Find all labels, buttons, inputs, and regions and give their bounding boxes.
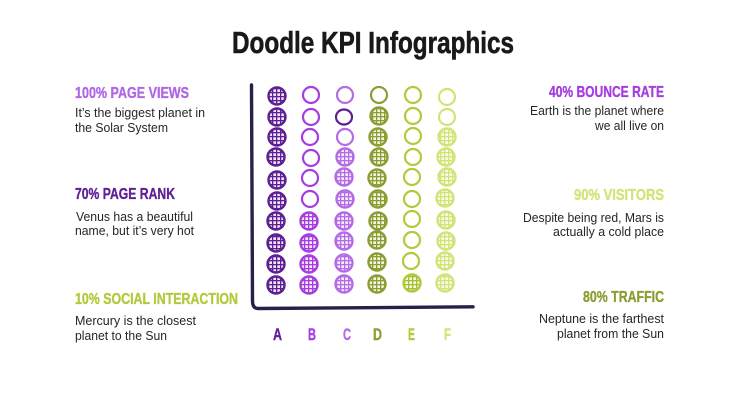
axis labels: [273, 326, 451, 344]
axis labels: D: [373, 326, 382, 344]
axis labels: A: [273, 326, 282, 344]
chart: column E: [403, 87, 421, 292]
text block: 100% page views: the Solar System: [75, 120, 168, 135]
text block: 90% visitors: actually a cold place: [553, 224, 664, 239]
text block: 40% bounce rate: Earth is the planet where: [530, 103, 664, 118]
text block: 40% bounce rate: 40% BOUNCE RATE: [549, 84, 664, 101]
text block: 10% social interaction: 10% SOCIAL INTERACTION: [75, 291, 238, 308]
chart axes: [252, 85, 473, 308]
text block: 90% visitors: Despite being red, Mars is: [523, 210, 664, 225]
axis labels: E: [408, 326, 415, 344]
text block: 80% traffic: 80% TRAFFIC: [583, 289, 664, 306]
text block: 10% social interaction: [75, 291, 238, 343]
chart: column C: [336, 87, 354, 292]
text block: 40% bounce rate: [530, 84, 664, 133]
text block: 10% social interaction: planet to the Sun: [75, 328, 167, 343]
text block: 70% page rank: 70% PAGE RANK: [75, 186, 176, 203]
text block: 90% visitors: 90% VISITORS: [574, 187, 664, 204]
text block: 100% page views: [75, 85, 205, 135]
text block: 70% page rank: [75, 186, 194, 238]
text block: 100% page views: 100% PAGE VIEWS: [75, 85, 189, 102]
chart: column A: [268, 88, 286, 294]
text block: 10% social interaction: Mercury is the closest: [75, 313, 196, 328]
text block: 80% traffic: planet from the Sun: [557, 326, 664, 341]
axis labels: F: [444, 326, 451, 344]
text block: 80% traffic: Neptune is the farthest: [539, 311, 664, 326]
axis labels: C: [343, 326, 351, 344]
text block: 40% bounce rate: we all live on: [594, 118, 664, 133]
text block: 90% visitors: [523, 187, 664, 239]
axis labels: B: [308, 326, 316, 344]
chart: column D: [368, 87, 388, 292]
chart: column F: [436, 89, 456, 292]
text block: 70% page rank: Venus has a beautiful: [76, 209, 193, 224]
chart: column B: [300, 87, 319, 294]
title: Doodle KPI Infographics: [232, 25, 514, 60]
text block: 70% page rank: name, but it’s very hot: [75, 223, 194, 238]
text block: 100% page views: It’s the biggest planet in: [75, 105, 205, 120]
text block: 80% traffic: [539, 289, 664, 341]
